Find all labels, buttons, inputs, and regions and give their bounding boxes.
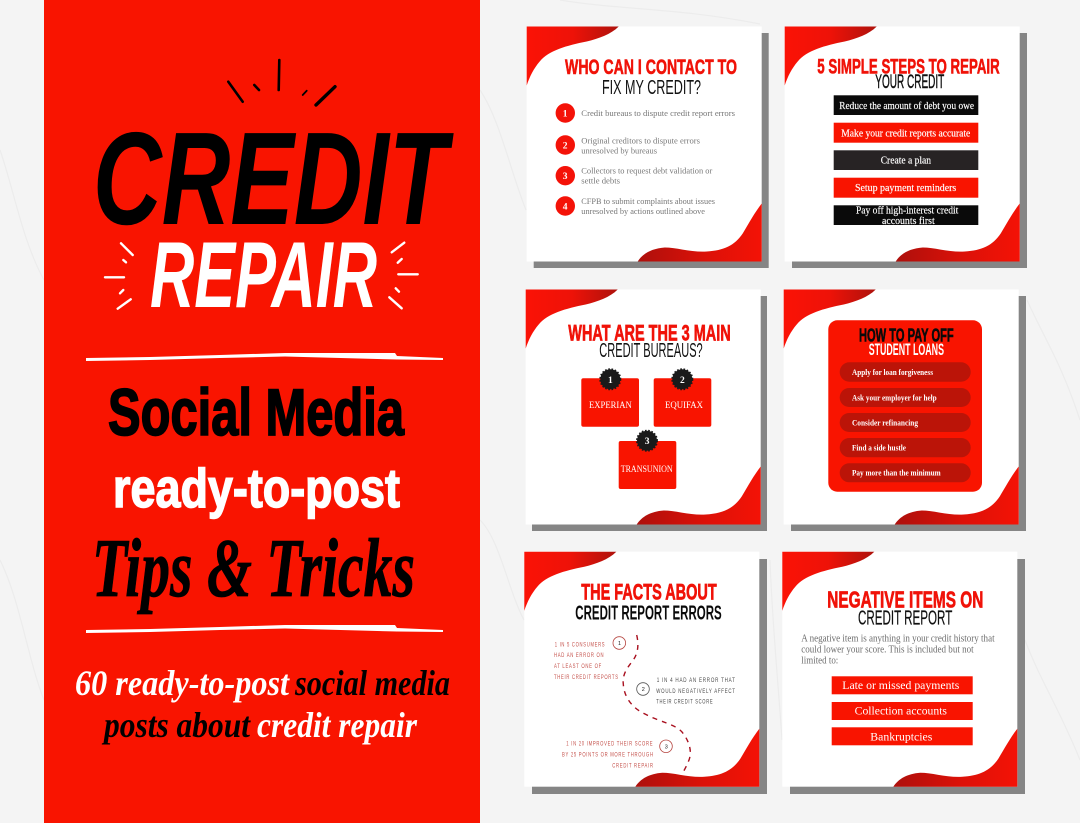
list item 3: settle debts <box>581 176 620 185</box>
heading: HOW TO PAY OFF <box>859 324 954 345</box>
list item 2 <box>556 135 700 155</box>
heading: CREDIT: CREDIT <box>93 105 454 252</box>
card: Experian: EXPERIAN <box>589 400 632 410</box>
decoration: top-left red wave <box>782 552 874 611</box>
card: TransUnion: TRANSUNION <box>621 464 673 474</box>
step 5: Pay off high-interest credit <box>856 206 959 217</box>
fact 3: CREDIT REPAIR <box>612 762 654 769</box>
list item 2: unresolved by bureaus <box>581 146 657 155</box>
list item 2: Original creditors to dispute errors <box>581 137 700 146</box>
decoration: top-left red wave <box>784 290 876 348</box>
paragraph <box>801 634 995 667</box>
list item 3 <box>556 166 713 185</box>
decoration: bottom-right red wave <box>895 466 1019 524</box>
list item 2: Ask your employer for help <box>852 392 937 402</box>
list item 4: unresolved by actions outlined above <box>581 207 705 216</box>
fact 2: 1 IN 4 HAD AN ERROR THAT <box>657 677 736 684</box>
list item 2 <box>840 388 971 407</box>
step 1: Reduce the amount of debt you owe <box>839 101 975 112</box>
fact 2: WOULD NEGATIVELY AFFECT <box>656 688 736 695</box>
heading: Social Media: Social Media <box>108 375 405 449</box>
fact 1: HAD AN ERROR ON <box>554 652 604 659</box>
decoration: top-left red wave <box>524 552 616 611</box>
paragraph: limited to: <box>801 656 838 667</box>
list item 1: Apply for loan forgiveness <box>852 367 934 377</box>
list item 4 <box>840 438 971 457</box>
text: tagline line one: 60 ready-to-post <box>75 663 290 703</box>
heading: REPAIR: REPAIR <box>150 222 377 327</box>
fact 1: 1 <box>618 641 621 647</box>
button: bankruptcies: Bankruptcies <box>870 731 933 743</box>
panel: three main credit bureaus <box>526 290 767 531</box>
list item 2: 2 <box>563 141 568 151</box>
subheading: FIX MY CREDIT? <box>602 77 701 99</box>
divider: upper chalk line <box>86 353 443 361</box>
panel: negative items on credit report <box>782 552 1025 794</box>
button: bankruptcies <box>832 727 973 745</box>
fact 2 <box>637 677 736 706</box>
subheading: CREDIT REPORT ERRORS <box>575 603 722 625</box>
decoration: bottom-right red wave <box>638 204 762 262</box>
paragraph: could lower your score. This is included but not <box>801 645 974 656</box>
text: tagline line one: social media <box>294 663 450 703</box>
fact 3 <box>562 740 672 769</box>
step 5: accounts first <box>882 216 935 227</box>
heading: WHO CAN I CONTACT TO <box>565 56 737 79</box>
heading: THE FACTS ABOUT <box>581 579 717 604</box>
subheading: CREDIT REPORT <box>858 607 952 629</box>
icon: white spark strokes around REPAIR <box>105 243 418 309</box>
heading: Tips & Tricks: Tips & Tricks <box>92 522 415 615</box>
list item 4: CFPB to submit complaints about issues <box>581 197 715 206</box>
decoration: top-left red wave <box>527 26 619 86</box>
list item 1: Credit bureaus to dispute credit report errors <box>581 109 735 118</box>
subheading: CREDIT BUREAUS? <box>599 340 703 362</box>
subheading: STUDENT LOANS <box>869 341 944 359</box>
fact 1: 1 IN 5 CONSUMERS <box>555 641 605 648</box>
icon: black spark strokes above title <box>228 60 335 105</box>
panel: who can I contact <box>527 26 769 268</box>
card: Experian: 1 <box>608 376 613 386</box>
list item 1 <box>556 103 735 123</box>
step 3 <box>834 150 978 170</box>
paragraph: A negative item is anything in your credit history that <box>801 634 995 645</box>
button: late or missed payments <box>832 676 973 694</box>
heading: WHAT ARE THE 3 MAIN <box>568 320 731 345</box>
panel: red title column <box>44 0 480 823</box>
dashed path connector <box>623 635 690 772</box>
fact 3: BY 25 POINTS OR MORE THROUGH <box>562 751 654 758</box>
fact 3: 3 <box>665 744 668 750</box>
list item 3: 3 <box>563 172 568 182</box>
fact 1: AT LEAST ONE OF <box>554 663 602 670</box>
button: late or missed payments: Late or missed payments <box>842 680 960 692</box>
heading: NEGATIVE ITEMS ON <box>827 587 983 613</box>
decoration: bottom-right red wave <box>637 466 761 524</box>
list item 5 <box>840 463 971 482</box>
divider: lower chalk line <box>86 625 443 633</box>
list item 4 <box>556 196 715 216</box>
list item 3 <box>840 413 971 432</box>
panel: how to pay off student loans <box>784 290 1026 531</box>
button: collection accounts: Collection accounts <box>855 706 948 718</box>
fact 1: THEIR CREDIT REPORTS <box>554 674 619 681</box>
card: Equifax <box>654 369 711 427</box>
list item 3: Consider refinancing <box>852 417 919 427</box>
subheading: YOUR CREDIT <box>875 72 945 93</box>
step 2 <box>834 123 978 143</box>
decoration: bottom-right red wave <box>896 204 1020 262</box>
fact 2: THEIR CREDIT SCORE <box>656 699 713 706</box>
step 2: Make your credit reports accurate <box>841 128 971 139</box>
list item 4: 4 <box>563 202 568 212</box>
decoration: top-left red wave <box>526 290 618 348</box>
step 5 <box>834 205 978 227</box>
decoration: bottom-right red wave <box>893 729 1017 787</box>
fact 3: 1 IN 20 IMPROVED THEIR SCORE <box>566 741 653 748</box>
list item 4: Find a side hustle <box>852 442 906 452</box>
list item 1: 1 <box>563 109 568 119</box>
panel: facts about credit report errors <box>524 552 767 794</box>
step 1 <box>834 95 978 115</box>
card: Equifax: 2 <box>680 376 685 386</box>
text: tagline line two: credit repair <box>257 705 418 745</box>
step 4: Setup payment reminders <box>855 183 956 194</box>
card: TransUnion: 3 <box>645 437 650 447</box>
heading: ready-to-post: ready-to-post <box>113 457 400 519</box>
step 3: Create a plan <box>881 156 931 167</box>
decoration: bottom-right red wave <box>635 729 759 787</box>
fact 2: 2 <box>642 687 645 693</box>
decoration: top-left red wave <box>785 26 877 86</box>
card: Equifax: EQUIFAX <box>665 400 703 410</box>
red list card <box>828 320 982 492</box>
button: collection accounts <box>832 702 973 720</box>
panel: 5 simple steps <box>785 26 1027 268</box>
text: tagline line one <box>75 663 450 703</box>
step 4 <box>834 178 978 198</box>
text: tagline line two <box>101 705 418 745</box>
list item 3: Collectors to request debt validation or <box>581 167 713 176</box>
list item 5: Pay more than the minimum <box>852 468 941 478</box>
fact 1 <box>554 637 626 681</box>
card: Experian <box>581 369 639 427</box>
card: TransUnion <box>619 431 676 489</box>
list item 1 <box>840 362 971 382</box>
text: tagline line two: posts about <box>101 705 251 745</box>
